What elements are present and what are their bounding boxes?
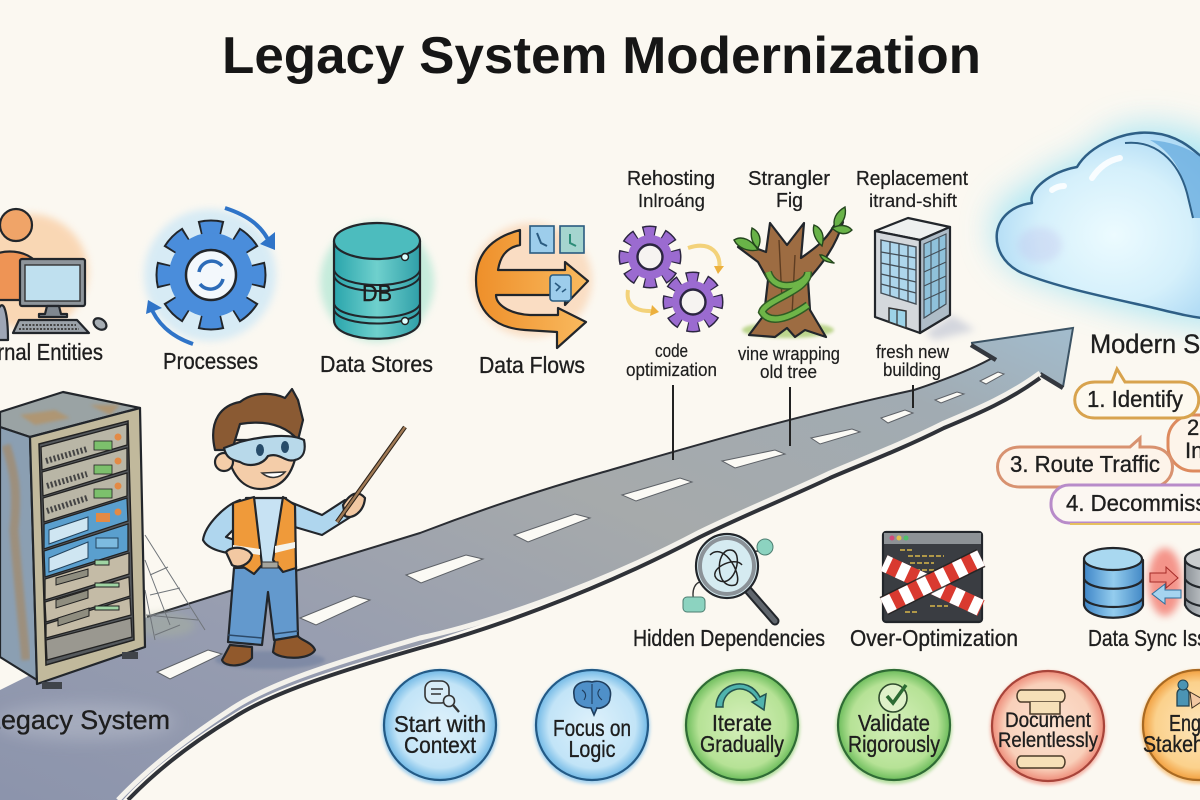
leader lines	[673, 385, 913, 460]
hand	[226, 548, 252, 567]
heading: rehosting: Rehosting	[627, 168, 715, 190]
steps bubbles	[998, 369, 1200, 524]
badge: document relentlessly: Relentlessly	[998, 729, 1098, 752]
heading: rehosting: Inlroáng	[638, 190, 705, 211]
badge: start with context	[382, 670, 498, 784]
shoe shadow	[215, 651, 325, 669]
heading: replacement: Replacement	[856, 168, 968, 190]
badge: focus on logic: Focus on	[553, 715, 631, 741]
label: data stores: Data Stores	[320, 351, 433, 377]
road with arrow head	[0, 328, 1073, 800]
caption: fresh new building: building	[883, 359, 941, 380]
head	[228, 440, 298, 489]
strategy: replacement	[856, 168, 975, 380]
icon: document magnifier	[425, 681, 459, 712]
legacy server rack	[0, 392, 145, 689]
road lane dashes	[157, 372, 1004, 679]
icon: data flows arrows	[472, 223, 592, 348]
badge: focus on logic: Logic	[568, 736, 616, 762]
icon: handshake	[1177, 680, 1200, 708]
shirt	[246, 498, 286, 566]
icon: external entities	[0, 209, 109, 340]
icon: purple gears	[625, 232, 724, 326]
caption: vine wrapping old tree	[738, 343, 840, 382]
bubble: 3 route traffic: 3. Route Traffic	[1010, 451, 1160, 477]
badge: iterate gradually	[684, 670, 800, 784]
shoes	[222, 645, 252, 665]
icon: check circle	[879, 684, 907, 712]
icon: data stores cylinder	[320, 222, 434, 342]
label: data flows: Data Flows	[479, 352, 585, 378]
left arm	[203, 500, 243, 555]
rack units	[41, 424, 132, 660]
badge: validate rigorously: Validate	[858, 710, 930, 736]
label: processes: Processes	[163, 348, 258, 374]
title: Legacy System Modernization	[222, 27, 981, 85]
caption: vine wrapping old tree: vine wrapping	[738, 343, 840, 364]
caption: code optimization: code	[655, 340, 688, 361]
pointer	[337, 427, 405, 522]
goggles	[224, 436, 305, 465]
heading: replacement: itrand-shift	[869, 190, 957, 211]
cobweb	[135, 535, 205, 640]
jeans	[228, 566, 298, 645]
badge: iterate gradually: Iterate	[712, 710, 772, 736]
cloud: modern system	[992, 124, 1200, 330]
badge: iterate gradually: Gradually	[700, 731, 784, 757]
label: hidden dependencies: Hidden Dependencies	[633, 625, 825, 651]
caption: code optimization: optimization	[626, 359, 717, 380]
bubble: 1 identify	[1075, 369, 1199, 418]
caption: fresh new building: fresh new	[876, 341, 950, 362]
icon: data sync databases	[1084, 548, 1200, 618]
heading: strangler fig: Strangler	[748, 168, 830, 190]
icon: hidden dependencies magnifier	[683, 534, 775, 621]
engineer character	[203, 389, 405, 669]
vest	[233, 497, 262, 574]
heading: strangler fig: Fig	[776, 190, 803, 212]
badge: engage stakeholders	[1141, 670, 1200, 784]
icon: data stores cylinder: DB	[362, 280, 392, 306]
icon: over-optimization window	[883, 532, 982, 622]
strategy: rehosting	[625, 168, 724, 380]
caption: vine wrapping old tree: old tree	[760, 361, 817, 382]
icon: tree with vine	[734, 207, 852, 338]
heading: strangler fig	[748, 168, 830, 212]
badge: validate rigorously	[836, 670, 952, 784]
caption: fresh new building	[876, 341, 950, 380]
badge: start with context: Start with	[394, 711, 486, 737]
hair	[213, 389, 303, 450]
icon: curved arrow	[716, 684, 766, 710]
smile	[262, 472, 285, 477]
badge: focus on logic	[534, 670, 650, 784]
icon: scrolls	[1017, 690, 1065, 768]
bubble: 2 integrate	[1168, 415, 1200, 471]
icon: processes gear	[144, 208, 276, 344]
bubble: 3 route traffic	[998, 438, 1172, 487]
bubble: 1 identify: 1. Identify	[1087, 386, 1183, 412]
badge: start with context: Context	[404, 732, 477, 758]
right arm	[285, 500, 352, 535]
badge: document relentlessly: Document	[1005, 709, 1091, 732]
label: over-optimization: Over-Optimization	[850, 625, 1018, 651]
strategy: strangler fig	[734, 168, 852, 382]
badge: validate rigorously: Rigorously	[848, 731, 940, 757]
icon: new building	[875, 218, 975, 340]
icon: brain	[574, 681, 611, 715]
heading: replacement	[856, 168, 968, 211]
heading: rehosting	[627, 168, 715, 211]
badge: document relentlessly	[990, 671, 1106, 785]
caption: code optimization	[626, 340, 717, 380]
bubble: 4 decommission	[1051, 485, 1200, 524]
